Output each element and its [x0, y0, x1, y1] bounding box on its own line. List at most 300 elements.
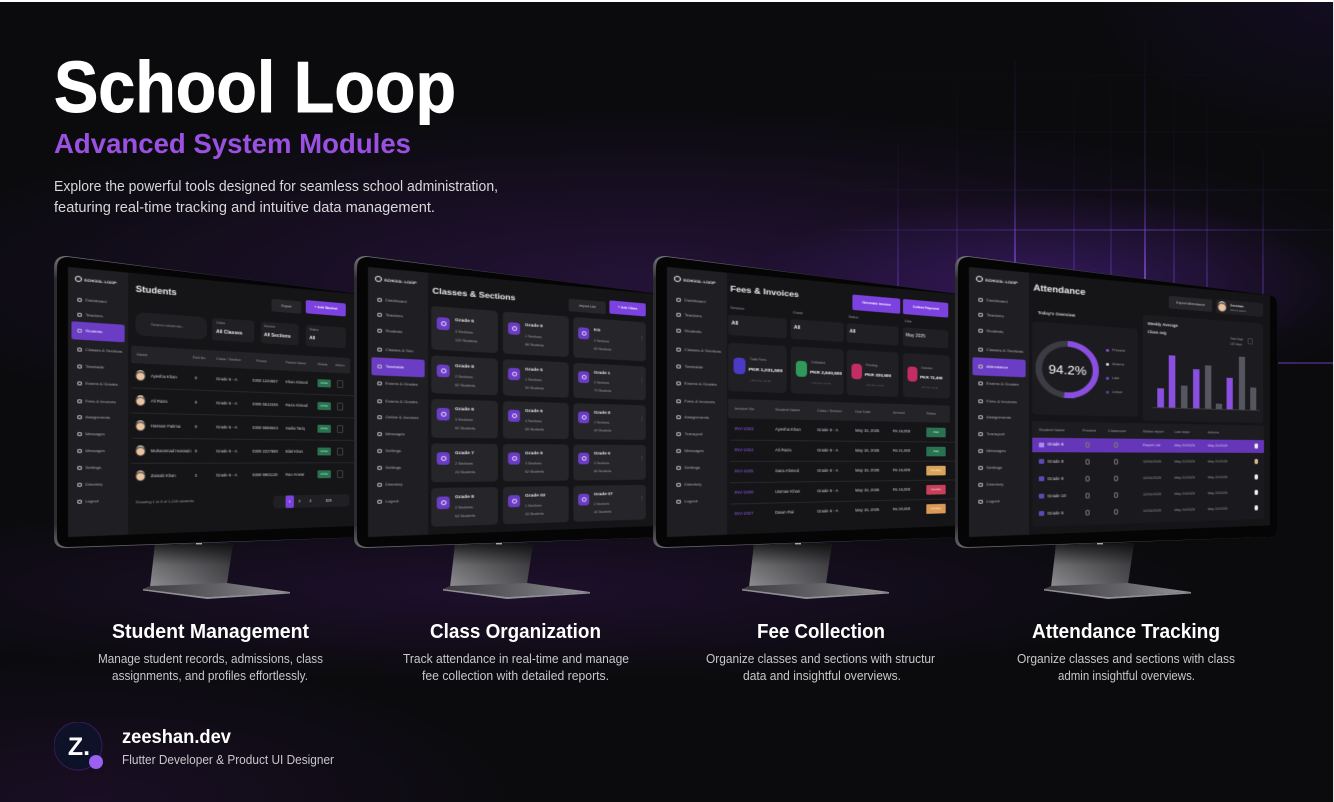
caption: attendance tracking: Attendance Tracking: [1032, 621, 1220, 643]
table row 4: INV-1026: [735, 490, 753, 495]
caption: class organization: Track attendance in real-time and manage: [403, 651, 629, 666]
sidebar: Messages: [85, 432, 105, 436]
table header: Status: [926, 412, 936, 416]
panel: weekly bar chart: Total Days: [1230, 337, 1243, 341]
stat card: overdue: PKR 72,400: [920, 375, 943, 380]
filter labels and dropdowns: All: [850, 329, 856, 335]
panel: weekly bar chart: 120 Days: [1230, 342, 1242, 346]
intro text: [54, 178, 498, 216]
table row 2: Active: [321, 404, 328, 407]
class cards: ⋮: [640, 416, 644, 422]
sidebar: SCHOOL LOOP: [84, 277, 117, 285]
table header: [728, 399, 950, 423]
attendance table: 12/04/2025: [1143, 509, 1161, 513]
filter: class: Class: [216, 321, 225, 325]
table row 4: Rs 15,000: [893, 487, 910, 492]
table header: Phone: [256, 359, 267, 363]
sidebar: Attendance: [986, 365, 1008, 370]
table row 4: Active: [321, 449, 328, 453]
table row 5: Active: [321, 472, 328, 476]
search box: [136, 312, 207, 340]
table row 2: Raza Ahmad: [286, 403, 308, 408]
attendance table: May 22/2025: [1174, 476, 1195, 480]
filter: section: All Sections: [264, 332, 291, 340]
sidebar: Dashboard: [986, 298, 1007, 304]
sidebar: Classes & Sections: [986, 348, 1023, 354]
caption: fee collection: Fee Collection: [757, 621, 885, 643]
sidebar: Logout: [986, 499, 1000, 504]
export button: Export: [281, 304, 292, 309]
filter: section: [261, 321, 298, 345]
pagination: 3: [309, 499, 312, 503]
class cards: 88 Students: [525, 343, 544, 348]
table row 5: Pending: [931, 507, 941, 510]
class cards: KG: [594, 328, 601, 333]
panel: attendance donut: [1032, 321, 1138, 417]
sidebar: Teachers: [385, 313, 403, 318]
table row 4: Usman Khan: [775, 489, 800, 494]
attendance table: May 20/2025: [1208, 444, 1227, 448]
table header: Name: [137, 353, 148, 357]
table row 1: May 15, 2025: [855, 428, 879, 433]
profile chip: Zeeshan: [1230, 303, 1244, 308]
sidebar: Fees & Invoices: [986, 400, 1017, 404]
class cards: Grade 03: [525, 494, 545, 499]
table row 3: Rs 15,000: [893, 468, 910, 472]
donut chart: 94.2%: [1091, 378, 1101, 401]
sidebar: [368, 267, 428, 537]
table row 3: 0: [195, 424, 197, 429]
table row 5: Grade 6 - A: [216, 473, 237, 478]
add student button: [306, 300, 346, 316]
screen: fees dashboard: [667, 267, 968, 537]
sidebar: Directory: [684, 483, 702, 487]
attendance table: 12/04/2025: [1143, 476, 1161, 480]
stat card: pending: -3% this month: [866, 383, 884, 387]
stat card: total: [728, 343, 787, 393]
class cards: 4 Sections: [525, 419, 542, 423]
export button: Export Attendance: [1176, 301, 1205, 307]
class cards: 1 Sections: [525, 378, 542, 382]
sidebar: Messages: [986, 449, 1006, 453]
caption: student management: [98, 621, 323, 683]
table row 3: Pending: [931, 468, 941, 472]
intro text: featuring real-time tracking and intuitive data management.: [54, 199, 435, 216]
table row 2: May 15, 2025: [855, 448, 879, 453]
sidebar: [68, 267, 128, 537]
class cards: 2 Sections: [594, 502, 609, 506]
table row 2: Rs 21,000: [893, 448, 910, 453]
pagination: [273, 494, 349, 508]
attendance table: May 22/2025: [1208, 476, 1227, 479]
class cards: Grade 6: [525, 409, 543, 414]
class cards: 2 Sections: [594, 381, 609, 385]
caption: student management: Student Management: [112, 621, 309, 643]
attendance table: Present: [1082, 429, 1096, 433]
panel: weekly bar chart: [1143, 314, 1263, 423]
attendance table: May 23/2025: [1174, 492, 1195, 496]
table header: [131, 346, 350, 374]
class cards: 1 Sections: [525, 504, 542, 508]
monitor: attendance: [955, 256, 1277, 599]
caption: attendance tracking: [1017, 621, 1235, 683]
class cards: Grade 5: [525, 368, 543, 373]
table row 2: [730, 446, 955, 462]
attendance table: Classroom: [1108, 429, 1126, 433]
table row 1: Rs 15,000: [893, 429, 910, 433]
overview label: Today's Overview: [1038, 310, 1075, 318]
table row 5: [135, 470, 344, 482]
add class button: [609, 300, 646, 316]
class cards: 1 Sections: [525, 334, 542, 339]
caption: class organization: Class Organization: [430, 621, 601, 643]
attendance table: Grade 8: [1047, 458, 1064, 463]
class cards: Grade 6: [594, 452, 610, 456]
table row 3: Sadia Tariq: [286, 426, 305, 431]
table header: Student Name: [775, 408, 800, 412]
class cards: Grade 9: [525, 323, 543, 329]
table row 5: Zainab Khan: [151, 473, 176, 478]
attendance table: [1032, 422, 1264, 516]
sidebar: Logout: [85, 499, 99, 504]
sidebar: Assignments: [85, 415, 110, 420]
heading: Fees & Invoices: [730, 284, 799, 299]
attendance table: Grade 5: [1047, 510, 1064, 516]
attendance table: May 24/2025: [1174, 508, 1195, 512]
attendance table: Grade 10: [1047, 493, 1066, 498]
filter labels and dropdowns: All: [794, 325, 800, 331]
class cards: 62 Students: [525, 470, 544, 474]
filter labels and dropdowns: Grade: [793, 311, 803, 315]
table row 2: 0300 5512345: [252, 402, 278, 407]
screen: attendance dashboard: [969, 267, 1270, 537]
stat card: overdue: Overdue: [921, 366, 933, 370]
attendance table: Last days: [1174, 430, 1190, 434]
class cards: 82 Students: [455, 383, 475, 388]
table row 3: [730, 466, 955, 484]
donut legend: Present: [1112, 348, 1125, 353]
sidebar: Students: [85, 329, 102, 334]
export button: [1169, 296, 1212, 312]
table row 4: 0300 2227890: [252, 449, 278, 454]
table row 1: Khan Ahmed: [286, 379, 308, 385]
table row 2: Ali Raza: [151, 399, 167, 404]
class cards: 24 Students: [455, 470, 475, 474]
top edge highlight: [0, 0, 1334, 2]
profile chip: [1216, 299, 1263, 317]
table header: Invoice No.: [735, 407, 755, 411]
table row 2: Paid: [933, 449, 939, 453]
sidebar: Timetable: [684, 365, 703, 370]
table row 5: [734, 504, 946, 516]
table row 1: Grade 6 - A: [216, 376, 237, 382]
stat card: collected: [791, 346, 844, 395]
search box: Search students...: [151, 322, 185, 329]
class cards: Grade 7: [455, 451, 474, 456]
panel: weekly bar chart: Class avg: [1148, 329, 1166, 335]
sidebar: Timetable: [385, 365, 404, 370]
sidebar: Exams & Grades: [986, 382, 1019, 387]
table row 2: INV-1024: [735, 447, 753, 452]
stat card: pending: Pending: [866, 363, 878, 368]
table row 2: Ali Raza: [775, 448, 791, 452]
sidebar: Exams & Grades: [85, 382, 118, 387]
stat card: overdue: -2% this month: [921, 385, 938, 390]
donut legend: [1106, 348, 1126, 394]
table row 3: INV-1025: [735, 469, 753, 473]
monitor: students: [54, 256, 354, 599]
sidebar: [969, 267, 1029, 537]
sidebar: Teachers: [85, 313, 103, 318]
attendance table: 12/04/2025: [1143, 492, 1161, 496]
table row 5: Rao Anwar: [286, 472, 304, 477]
donut legend: Leave: [1112, 390, 1122, 394]
sidebar: Students: [986, 329, 1003, 334]
sidebar: Timetable: [85, 365, 104, 370]
class cards: Grade 9: [525, 452, 543, 456]
sidebar: Students: [684, 329, 701, 334]
class cards: 80 Students: [594, 470, 611, 473]
sidebar: Logout: [385, 499, 399, 504]
table row 2: [132, 395, 354, 418]
class cards: Grade 8: [594, 411, 610, 416]
attendance table: May 22/2025: [1174, 459, 1195, 463]
collect payment button: [903, 299, 948, 318]
table row 1: [730, 426, 955, 442]
class cards: 3 Sections: [455, 330, 473, 335]
filter: section: Section: [264, 324, 275, 329]
table row 1: Ayesha Khan: [151, 374, 177, 379]
stat card: total: PKR 1,031,500: [749, 367, 783, 373]
class cards: 40 Students: [594, 510, 611, 514]
filter labels and dropdowns: [728, 306, 948, 348]
table header: Class / Section: [216, 357, 241, 362]
attendance table: Actions: [1208, 431, 1219, 434]
class cards: Grade 07: [594, 492, 613, 497]
caption: class organization: [403, 621, 629, 683]
filter labels and dropdowns: All: [731, 321, 738, 327]
table row 1: 0300 1234567: [252, 378, 278, 384]
table row 1: [131, 370, 354, 396]
table row 1: Paid: [933, 430, 939, 434]
export button: [272, 299, 301, 314]
attendance table: May 23/2025: [1208, 491, 1227, 495]
stat card: pending: PKR 320,500: [865, 372, 891, 378]
table row 2: 0: [195, 400, 197, 405]
class cards: Grade 6: [455, 407, 474, 413]
sidebar: Assignments: [684, 415, 709, 420]
stat card: total: Total Fees: [750, 357, 766, 362]
table row 4: Overdue: [931, 487, 941, 491]
filter labels and dropdowns: Date: [905, 319, 912, 323]
right edge highlight: [1333, 0, 1334, 802]
sidebar: Directory: [385, 483, 403, 487]
filter: status: Status: [309, 328, 319, 332]
sidebar: Directory: [986, 483, 1004, 487]
filter labels and dropdowns: Session: [730, 306, 744, 311]
filter: status: All: [309, 336, 315, 341]
table row 3: Grade 6 - A: [216, 425, 237, 430]
attendance table: Grade 9: [1047, 476, 1064, 481]
heading: Classes & Sections: [432, 286, 515, 302]
sidebar: Classes & Sec: [385, 348, 413, 353]
caption: student management: Manage student records, admissions, class: [98, 651, 323, 666]
import button: Import List: [579, 304, 596, 309]
logo badge: Z.: [68, 733, 90, 761]
class cards: 2 Sections: [455, 505, 473, 510]
profile chip: School Admin: [1230, 308, 1246, 313]
table header: Amount: [893, 411, 905, 415]
table header: Roll No: [193, 356, 205, 360]
table row 4: Bilal Khan: [286, 449, 303, 454]
attendance table: 12/04/2025: [1143, 459, 1161, 463]
table row 4: Grade 6 - A: [817, 488, 838, 493]
class cards: 55 Students: [525, 428, 544, 432]
filter labels and dropdowns: May 2025: [906, 333, 925, 339]
stat card: pending: [847, 350, 898, 397]
class cards: Grade 8: [455, 495, 474, 500]
attendance table: Report List: [1143, 443, 1161, 447]
table row 2: Grade 6 - A: [216, 401, 237, 406]
sidebar: Settings: [684, 466, 700, 470]
screen: students dashboard: [68, 267, 369, 537]
sidebar: Settings: [385, 449, 401, 453]
filter labels and dropdowns: Status: [849, 315, 858, 319]
pagination: 1: [289, 499, 291, 504]
table row 4: Grade 6 - A: [216, 449, 237, 453]
heading: Attendance: [1033, 283, 1086, 297]
sidebar: Assignments: [986, 415, 1011, 420]
class cards: Grade 6: [455, 318, 474, 324]
sidebar: Exams & Grades: [684, 382, 717, 387]
add class button: + Add Class: [618, 305, 637, 311]
caption: fee collection: [706, 621, 936, 683]
table footer text: Showing 1 to 5 of 1,245 students: [136, 499, 194, 504]
class cards: 40 Students: [594, 429, 611, 433]
table row 2: Grade 6 - A: [817, 448, 838, 453]
table row 4: Muhammad Hasnain: [151, 448, 191, 453]
table row 3: Active: [321, 427, 328, 430]
sidebar: Directory: [85, 483, 103, 487]
donut legend: Absent: [1112, 362, 1124, 367]
caption: fee collection: data and insightful overviews.: [743, 668, 901, 683]
pagination: 125: [326, 498, 332, 503]
sidebar: Transport: [684, 432, 703, 436]
subtitle: Advanced System Modules: [54, 128, 411, 159]
screen: classes dashboard: [368, 267, 669, 537]
filter: status: [306, 325, 346, 348]
table header: Status: [318, 362, 327, 366]
class cards: Grade 1: [594, 371, 610, 376]
sidebar: Exams & Grades: [385, 382, 418, 387]
table row 5: 0300 9901120: [252, 472, 278, 477]
panel: weekly bar chart: Weekly Average: [1148, 321, 1178, 328]
stat card: overdue: [903, 353, 950, 399]
table row 3: [131, 420, 354, 441]
class cards: 1 Sections: [594, 421, 609, 425]
class cards: ⋮: [640, 378, 644, 383]
caption: student management: assignments, and profiles effortlessly.: [112, 668, 308, 683]
class cards: ⋮: [640, 336, 644, 341]
caption: class organization: fee collection with detailed reports.: [422, 668, 609, 683]
monitor: classes: [354, 256, 653, 599]
attendance table: Student Name: [1039, 428, 1065, 432]
attendance table: May 20/2025: [1174, 444, 1195, 447]
stat card: collected: PKR 2,640,500: [810, 370, 842, 376]
table row 4: [131, 445, 354, 464]
sidebar: Teachers: [684, 313, 702, 318]
table header: Action: [335, 363, 345, 367]
sidebar: Messages: [85, 449, 105, 453]
filter: class: [212, 318, 254, 343]
logo badge: [54, 722, 103, 770]
class cards: 43 Students: [525, 512, 544, 516]
class cards: ⋮: [640, 496, 644, 501]
filter: class: All Classes: [216, 329, 242, 336]
author name and role: [122, 727, 335, 767]
table row 3: May 15, 2025: [855, 468, 879, 473]
table row 5: Rs 20,000: [893, 506, 910, 511]
class cards: 2 Sections: [455, 462, 473, 466]
sidebar: Online & Invoices: [385, 415, 419, 420]
sidebar: Dashboard: [385, 298, 406, 304]
table row 5: May 15, 2025: [855, 507, 879, 512]
sidebar: Logout: [684, 499, 698, 504]
table row 5: Dawn Rai: [775, 510, 794, 515]
caption: attendance tracking: admin insightful overviews.: [1058, 668, 1195, 683]
sidebar: SCHOOL LOOP: [985, 277, 1018, 285]
table row 1: INV-1023: [735, 426, 753, 431]
table row 1: Grade 6 - A: [817, 427, 838, 432]
donut legend: Late: [1112, 376, 1119, 380]
table header: Due Date: [855, 410, 871, 414]
table row 1: Active: [321, 381, 328, 385]
table row 4: May 15, 2025: [855, 488, 879, 493]
stat card: collected: +5% this month: [811, 381, 831, 385]
attendance table: May 22/2025: [1208, 459, 1227, 463]
sidebar: SCHOOL LOOP: [683, 277, 716, 285]
sidebar: Settings: [986, 466, 1002, 470]
sidebar: Messages: [684, 449, 704, 453]
stat card: total: +8% this month: [750, 378, 771, 383]
generate invoice button: Generate Invoice: [862, 301, 891, 307]
heading: Students: [136, 284, 177, 297]
class cards: 120 Students: [455, 338, 477, 344]
collect payment button: Collect Payment: [913, 305, 939, 311]
table row 1: 0: [195, 376, 197, 380]
monitor: fees: [653, 256, 955, 599]
sidebar: Messages: [385, 432, 405, 436]
generate invoice button: [852, 294, 900, 314]
sidebar: Transport: [986, 432, 1005, 436]
sidebar: [667, 267, 727, 537]
sidebar: Fees & Invoices: [684, 400, 715, 404]
table row 4: 0: [195, 449, 197, 453]
pagination: 2: [298, 499, 301, 503]
sidebar: Fees & Invoices: [85, 400, 116, 404]
sidebar: Exams & Grades: [385, 400, 418, 404]
table row 5: 2: [195, 473, 197, 478]
attendance table: May 24/2025: [1208, 507, 1227, 511]
class cards: 3 Sections: [455, 418, 473, 422]
attendance table: Status report: [1143, 430, 1164, 434]
sidebar: Settings: [385, 466, 401, 470]
class cards: Grade 8: [455, 364, 474, 370]
sidebar: Teachers: [986, 313, 1004, 318]
class cards: 63 Students: [455, 514, 475, 518]
author name and role: zeeshan.dev: [122, 727, 231, 748]
sidebar: Classes & Sections: [684, 348, 721, 354]
